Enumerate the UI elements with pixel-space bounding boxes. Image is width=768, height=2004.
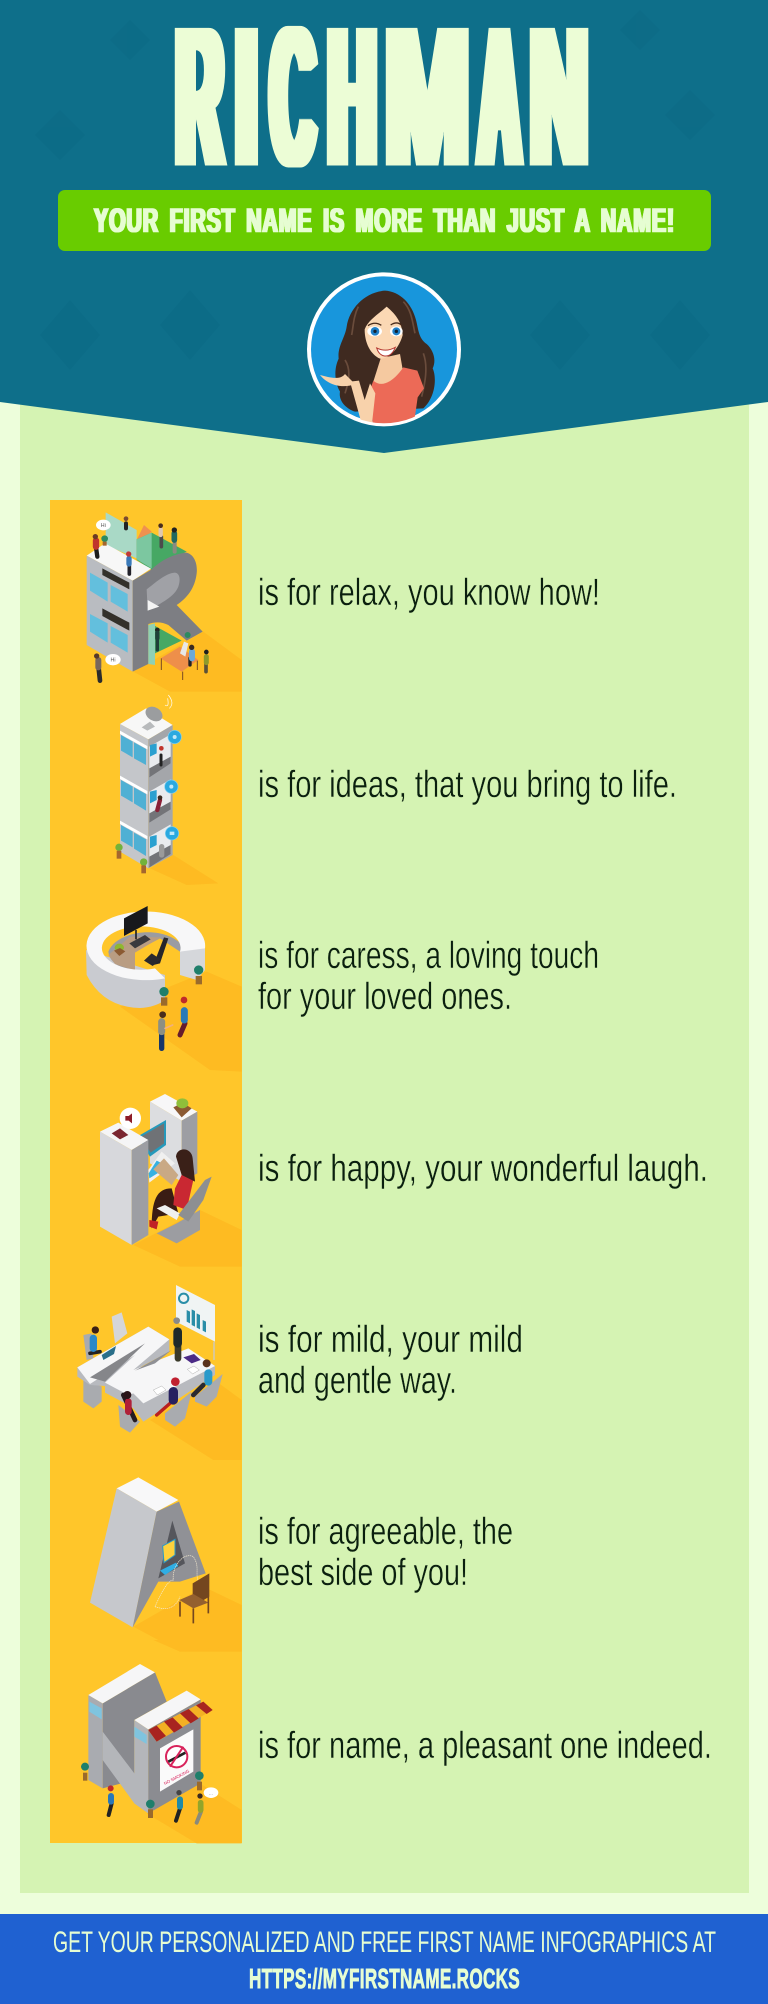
- icon: letter A with chair: [90, 1477, 242, 1652]
- icon: letter N storefront: NO SMOKING: [163, 1768, 191, 1786]
- icon: letter R building: [87, 512, 242, 692]
- text: A lines: is for agreeable, the: [258, 1511, 513, 1553]
- icon: letter R building: Hi: [101, 523, 106, 529]
- text: A lines: [258, 1511, 513, 1594]
- icon: letter N storefront: [81, 1640, 242, 1843]
- avatar: cartoon woman in circle: [307, 272, 461, 426]
- text: A lines: best side of you!: [258, 1552, 468, 1594]
- footer band: HTTPS://MYFIRSTNAME.ROCKS: [249, 1963, 520, 1994]
- subtitle banner: [58, 190, 711, 251]
- icon: letter M meeting table: [77, 1285, 242, 1460]
- text: C lines: for your loved ones.: [258, 976, 512, 1018]
- text: M lines: and gentle way.: [258, 1360, 457, 1402]
- icon: letter H workstation: [100, 1094, 242, 1267]
- text: C lines: is for caress, a loving touch: [258, 935, 599, 977]
- icon: letter C desk: [86, 906, 242, 1072]
- text: M lines: [258, 1319, 523, 1402]
- panel: yellow illustration column: [50, 500, 242, 1843]
- panel: main content background: [20, 380, 749, 1893]
- icon: letter N storefront: ...: [209, 1791, 213, 1797]
- text: R line: is for relax, you know how!: [258, 572, 600, 614]
- icon: letter R building: Hi: [110, 658, 116, 664]
- panel: teal header: [0, 0, 768, 453]
- icon: letter I tower: [115, 695, 218, 885]
- footer band: [0, 1914, 768, 2004]
- text: C lines: [258, 935, 599, 1018]
- text: M lines: is for mild, your mild: [258, 1319, 523, 1361]
